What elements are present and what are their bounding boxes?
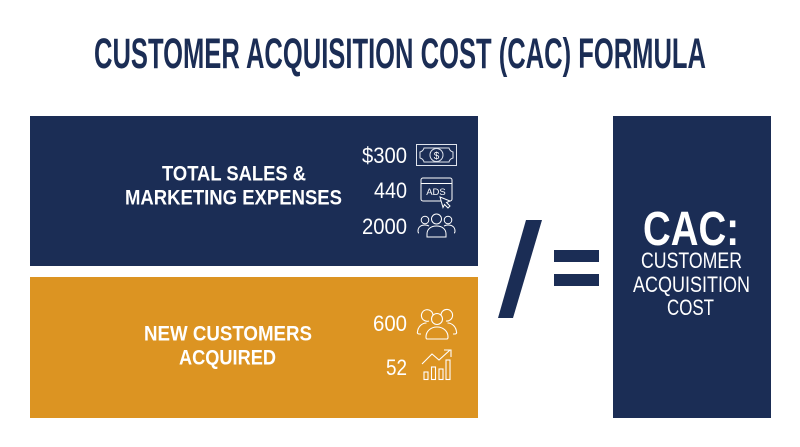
panel: CAC result [613,116,771,418]
icon: group of people [418,214,455,237]
text: customer acquisition cost: COST [667,295,714,320]
heading: new customers acquired [144,322,312,370]
heading: total sales and marketing expenses [125,162,342,210]
icon: ads browser window: ADS [426,187,446,198]
value: 2000: 2000 [362,214,407,239]
icon: ads browser window [421,178,452,208]
icon: equals sign [554,250,599,286]
heading: total sales and marketing expenses: MARKETING EXPENSES [125,186,342,210]
icon: division slash [498,220,542,318]
icon: group of customers [417,309,457,339]
icon: banknote: $ [434,151,440,162]
text: customer acquisition cost: CUSTOMER [641,248,742,273]
heading: new customers acquired: NEW CUSTOMERS [144,322,312,346]
heading: new customers acquired: ACQUIRED [179,346,276,370]
value: 52: 52 [386,355,407,380]
value: $300: $300 [362,143,407,168]
panel: total sales and marketing expenses [30,116,478,266]
value: 600: 600 [373,311,407,336]
icon: banknote [416,144,456,166]
heading: CAC: CAC: [643,203,739,256]
panel: new customers acquired [30,277,478,418]
text: customer acquisition cost: ACQUISITION [633,272,750,297]
icon: growth chart [422,350,451,380]
heading: total sales and marketing expenses: TOTAL SALES & [162,162,306,186]
text: customer acquisition cost [633,248,750,320]
value: 440: 440 [374,178,407,203]
